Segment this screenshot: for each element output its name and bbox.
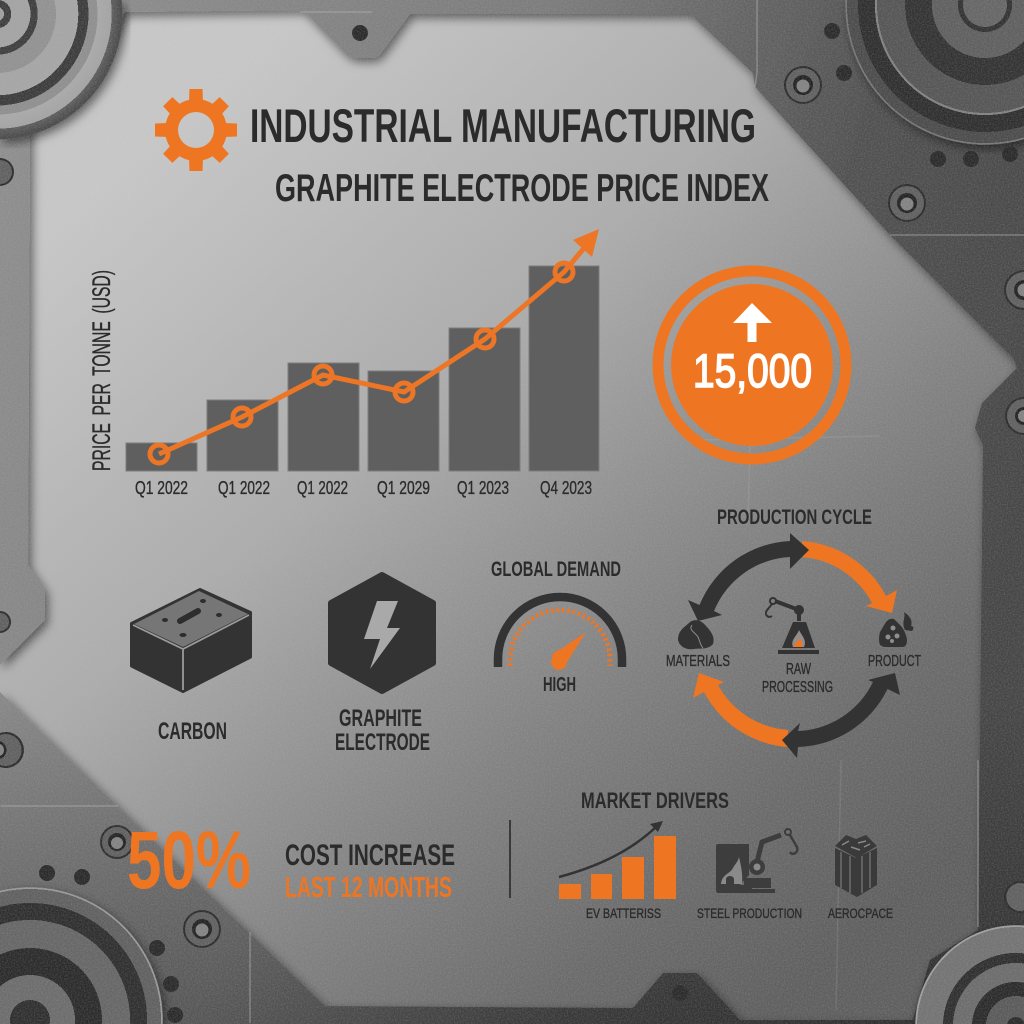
value: 15,000 (693, 344, 812, 397)
label: high: HIGH (543, 674, 576, 696)
top-right gear disc (844, 0, 1024, 146)
label: cost increase: COST INCREASE (285, 839, 455, 872)
bottom-left gear disc (0, 886, 164, 1024)
label: steel production: STEEL PRODUCTION (697, 905, 802, 921)
x-axis labels: Q1 2029 (377, 478, 430, 498)
icon: orange gear (155, 89, 237, 171)
label: raw processing: PROCESSING (762, 679, 833, 696)
heading: MARKET DRIVERS (581, 788, 729, 813)
x-axis labels: Q1 2022 (297, 478, 348, 498)
x-axis labels (135, 478, 592, 498)
heading: GLOBAL DEMAND (491, 558, 621, 581)
icon: steel production (716, 829, 797, 893)
label: materials: MATERIALS (666, 653, 730, 670)
cycle arrows (688, 533, 900, 758)
label: carbon: CARBON (158, 718, 227, 745)
icon: aerospace block (835, 835, 877, 897)
icon: gauge (498, 597, 622, 670)
label: last 12 months: LAST 12 MONTHS (285, 872, 452, 904)
callout: 15,000 price (658, 271, 846, 459)
bar and line chart: price per tonne (88, 229, 599, 498)
graphite electrode (331, 575, 433, 756)
value: 50% (127, 815, 251, 906)
label: graphite electrode: GRAPHITE (339, 705, 422, 732)
x-axis labels: Q4 2023 (540, 478, 592, 498)
x-axis labels: Q1 2022 (218, 478, 270, 498)
label: graphite electrode (335, 705, 430, 756)
icon: rock (678, 620, 714, 649)
title: INDUSTRIAL MANUFACTURING (250, 99, 756, 152)
subtitle: GRAPHITE ELECTRODE PRICE INDEX (275, 167, 769, 210)
label: product: PRODUCT (868, 653, 921, 670)
trend line with arrow (150, 229, 599, 463)
icon: up arrow (733, 303, 772, 342)
x-axis labels: Q1 2022 (135, 478, 188, 498)
x-axis labels: Q1 2023 (457, 478, 509, 498)
icon: hexagon lightning bolt (331, 575, 433, 691)
icon: EV bars with arrow (559, 821, 676, 899)
production cycle (666, 506, 921, 758)
carbon block (132, 590, 250, 745)
label: EV batteries: EV BATTERISS (586, 905, 661, 921)
market drivers (559, 788, 893, 921)
icon: carbon block (132, 590, 250, 692)
y-axis label: PRICE PER TONNE (USD) (88, 270, 116, 471)
label: raw processing: RAW (786, 661, 812, 678)
icon: furnace with robot arm (766, 598, 819, 654)
global demand gauge (491, 558, 622, 696)
bars (126, 266, 599, 471)
label: aerospace: AEROCPACE (828, 905, 893, 921)
icon: product (879, 612, 913, 647)
label: graphite electrode: ELECTRODE (335, 729, 430, 756)
bottom-right gear disc (914, 924, 1024, 1024)
stat: 50% cost increase (127, 815, 455, 906)
top-left gear disc (0, 0, 124, 141)
heading: PRODUCTION CYCLE (717, 506, 872, 529)
label: raw processing (762, 661, 833, 696)
